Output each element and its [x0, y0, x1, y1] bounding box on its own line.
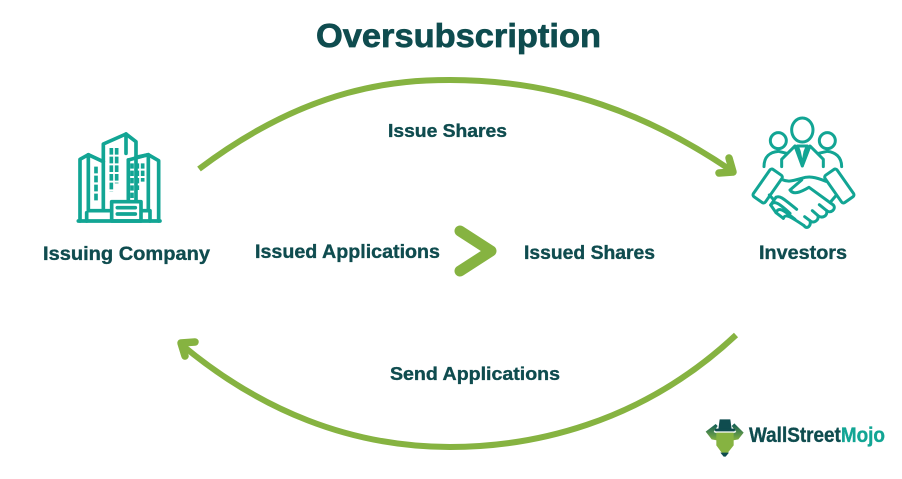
- arrow: issue shares: [199, 80, 733, 173]
- greater-than symbol: [460, 231, 491, 271]
- title: Oversubscription: [316, 17, 601, 54]
- label: issued shares: Issued Shares: [524, 243, 655, 264]
- label: issue shares: Issue Shares: [388, 121, 507, 141]
- label: issued applications: Issued Applications: [255, 242, 440, 263]
- arrow: send applications: [181, 335, 736, 447]
- label: investors: Investors: [759, 243, 847, 264]
- icon: office buildings: [78, 134, 160, 221]
- logo: WallStreetMojo: [706, 419, 885, 457]
- logo text: WallStreetMojo: [749, 424, 885, 447]
- logo mark: [706, 419, 744, 457]
- label: issuing company: Issuing Company: [43, 244, 210, 265]
- label: send applications: Send Applications: [390, 364, 560, 384]
- icon: investors handshake: [752, 118, 855, 227]
